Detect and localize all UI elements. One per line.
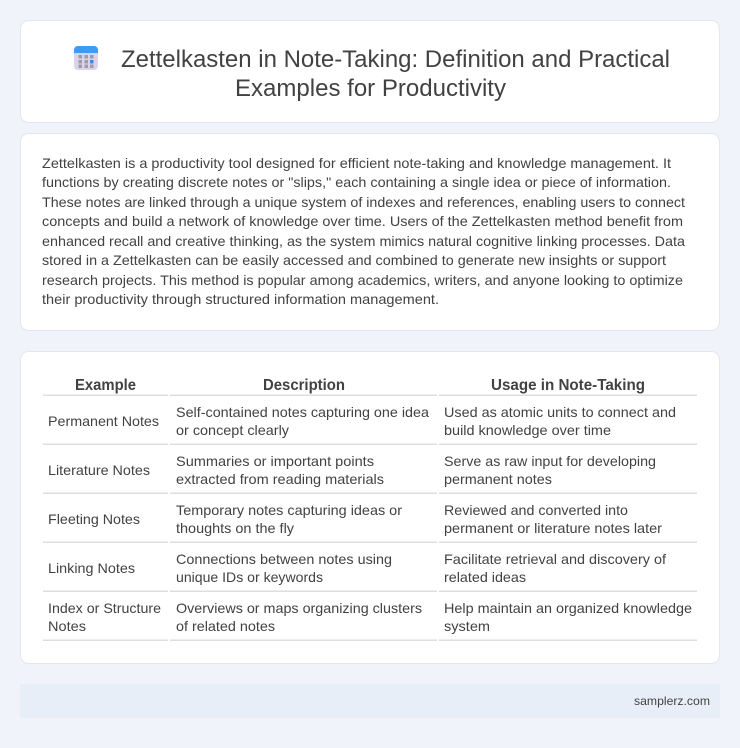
- table row: fleeting notes: Fleeting Notes: [48, 511, 140, 527]
- table row: fleeting notes: Reviewed and converted into: [444, 502, 628, 518]
- table row: index or structure notes: Notes: [48, 618, 86, 634]
- table row: literature notes: Summaries or important points: [176, 453, 374, 469]
- table row: linking notes: Linking Notes: [48, 560, 135, 576]
- table row: index or structure notes: [48, 600, 692, 634]
- table row: linking notes: related ideas: [444, 569, 526, 585]
- panel: header: [20, 20, 720, 122]
- table row: fleeting notes: thoughts on the fly: [176, 520, 294, 536]
- table header row: Description: [263, 377, 345, 394]
- text block: introduction paragraph: research projects. This method is popular among academics, writers, and anyone looking to optimize: [42, 272, 683, 288]
- table row: linking notes: [48, 551, 666, 585]
- table header row: Usage in Note-Taking: [491, 377, 645, 394]
- table row: index or structure notes: Index or Structure: [48, 600, 161, 616]
- table row: literature notes: permanent notes: [444, 471, 552, 487]
- table row: linking notes: Connections between notes using: [176, 551, 392, 567]
- text block: introduction paragraph: These notes are linked through a unique system of indexes and references, enabling users to connect: [42, 194, 685, 210]
- table row: permanent notes: Permanent Notes: [48, 413, 159, 429]
- text block: introduction paragraph: enhanced recall and creative thinking, as the system mimics natural cognitive linking processes. Data: [42, 233, 685, 249]
- table header row: Example: [75, 377, 136, 394]
- table header row: [75, 377, 645, 394]
- table row: fleeting notes: [48, 502, 662, 536]
- table row: permanent notes: build knowledge over time: [444, 422, 611, 438]
- icon: calendar: [74, 46, 98, 70]
- title: Zettelkasten in Note-Taking: Definition and Practical: [121, 46, 670, 73]
- footer: samplerz.com: [634, 694, 710, 708]
- title: Examples for Productivity: [235, 75, 506, 102]
- panel: introduction: [20, 134, 720, 330]
- footer: [20, 684, 720, 718]
- table row: permanent notes: or concept clearly: [176, 422, 289, 438]
- table row: literature notes: Literature Notes: [48, 462, 150, 478]
- table row: fleeting notes: Temporary notes capturing ideas or: [176, 502, 402, 518]
- text block: introduction paragraph: [42, 155, 685, 307]
- table row: literature notes: [48, 453, 656, 487]
- table row: index or structure notes: system: [444, 618, 490, 634]
- table row: literature notes: Serve as raw input for developing: [444, 453, 656, 469]
- table row: permanent notes: Self-contained notes capturing one idea: [176, 404, 429, 420]
- table row: fleeting notes: permanent or literature notes later: [444, 520, 662, 536]
- table row: index or structure notes: Overviews or maps organizing clusters: [176, 600, 422, 616]
- table row: permanent notes: [48, 404, 676, 438]
- title: [121, 46, 670, 102]
- text block: introduction paragraph: their productivity through structured information management.: [42, 291, 439, 307]
- table row: literature notes: extracted from reading materials: [176, 471, 384, 487]
- text block: introduction paragraph: concepts and build a network of knowledge over time. Users of the Zettelkasten method benefit from: [42, 213, 683, 229]
- text block: introduction paragraph: Zettelkasten is a productivity tool designed for efficient note-taking and knowledge management. It: [42, 155, 671, 171]
- text block: introduction paragraph: functions by creating discrete notes or "slips," each containing a single idea or piece of information.: [42, 174, 671, 190]
- table row: linking notes: Facilitate retrieval and discovery of: [444, 551, 666, 567]
- table row: index or structure notes: of related notes: [176, 618, 275, 634]
- table row: permanent notes: Used as atomic units to connect and: [444, 404, 676, 420]
- table row: index or structure notes: Help maintain an organized knowledge: [444, 600, 692, 616]
- text block: introduction paragraph: stored in a Zettelkasten can be easily accessed and combined to generate new insights or support: [42, 252, 666, 268]
- table row: linking notes: unique IDs or keywords: [176, 569, 323, 585]
- panel: examples table: [20, 352, 720, 664]
